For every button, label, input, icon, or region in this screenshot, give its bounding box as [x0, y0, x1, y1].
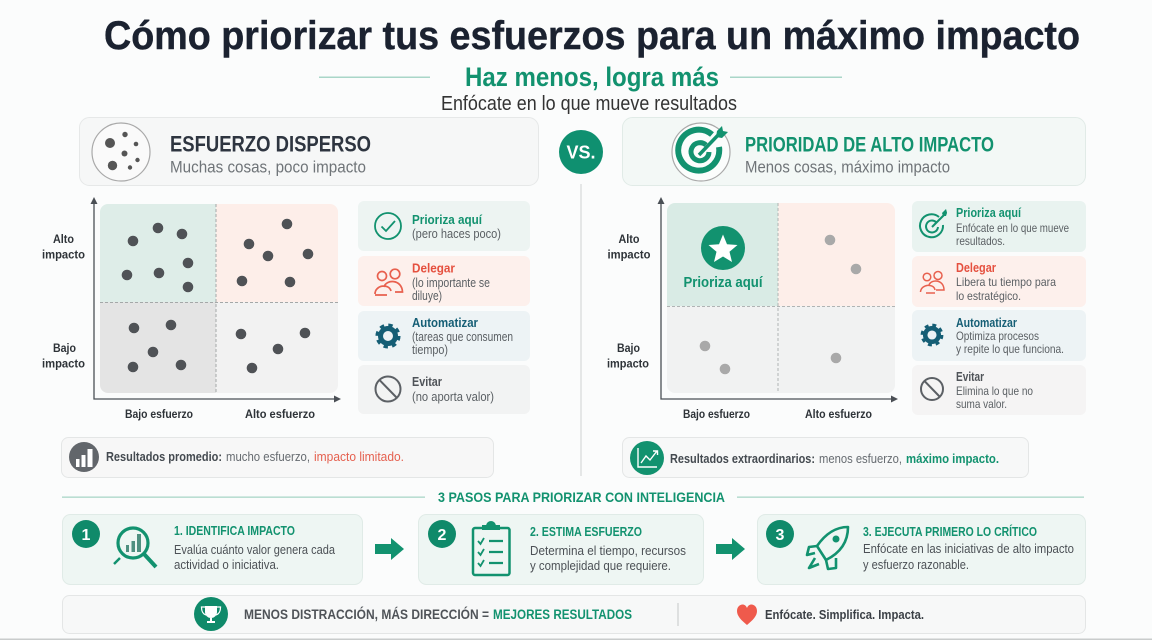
chart: right matrix: Alto esfuerzo [805, 407, 872, 421]
result: extraordinarios: máximo impacto. [906, 451, 999, 466]
bottom banner [62, 596, 1086, 634]
chart: right matrix [607, 197, 898, 421]
step 1: 1. IDENTIFICA IMPACTO [174, 524, 295, 538]
legend item: prioriza: (pero haces poco) [412, 227, 501, 241]
chart: left matrix: Bajo [53, 341, 76, 355]
step 3: y esfuerzo razonable. [863, 558, 969, 572]
vs badge: VS. [566, 142, 596, 162]
legend: right [912, 201, 1086, 415]
result: promedio [62, 438, 494, 478]
step 2 [418, 514, 704, 584]
legend item: delegar: Delegar [956, 261, 996, 275]
chart: right matrix: Bajo [617, 341, 640, 355]
legend item: automatizar [912, 310, 1086, 361]
chart: left matrix: Bajo esfuerzo [125, 407, 193, 421]
icon: growth chart badge [630, 441, 664, 475]
legend item: evitar: Evitar [956, 370, 984, 384]
panel: esfuerzo disperso header [80, 118, 538, 186]
bottom banner: Enfócate. Simplifica. Impacta. [765, 607, 924, 622]
result: extraordinarios [622, 438, 1028, 478]
icon: scattered dots [92, 123, 150, 181]
step 2: y complejidad que requiere. [530, 559, 671, 573]
step 2: Determina el tiempo, recursos [530, 544, 686, 558]
subheading: Menos cosas, máximo impacto [745, 159, 950, 177]
step 3 [758, 514, 1086, 584]
heading: PRIORIDAD DE ALTO IMPACTO [745, 134, 994, 156]
step 3: Enfócate en las iniciativas de alto impacto [863, 542, 1074, 556]
icon: clipboard [473, 522, 510, 575]
legend item: delegar: diluye) [412, 289, 442, 303]
result: promedio: mucho esfuerzo, [226, 449, 310, 464]
arrow 1 [375, 538, 404, 560]
result: promedio: impacto limitado. [314, 449, 404, 464]
legend item: prioriza [358, 201, 530, 251]
legend item: delegar: (lo importante se [412, 276, 490, 290]
legend item: prioriza: Prioriza aquí [956, 206, 1021, 220]
legend item: prioriza: Enfócate en lo que mueve [956, 221, 1069, 235]
label: prioriza aquí: Prioriza aquí [684, 274, 763, 291]
chart: left matrix: impacto [42, 248, 85, 262]
legend item: automatizar [358, 311, 530, 361]
panel: prioridad header [622, 118, 1086, 186]
icon: rocket [807, 527, 848, 569]
chart: right matrix: Bajo esfuerzo [683, 407, 750, 421]
legend item: delegar: Libera tu tiempo para [956, 275, 1056, 289]
step 3: 3. EJECUTA PRIMERO LO CRÍTICO [863, 524, 1037, 539]
legend item: evitar: suma valor. [956, 397, 1007, 411]
title: Cómo priorizar tus esfuerzos para un máximo impacto [104, 14, 1080, 58]
result: promedio: Resultados promedio: [106, 449, 222, 464]
icon: trophy [194, 597, 228, 631]
icon: star badge [701, 226, 745, 270]
legend item: automatizar: y repite lo que funciona. [956, 342, 1064, 356]
step 1: 1 [82, 527, 91, 544]
result: extraordinarios: Resultados extraordinarios: [670, 451, 815, 466]
step 1: Evalúa cuánto valor genera cada [174, 543, 335, 557]
legend item: automatizar: Optimiza procesos [956, 329, 1039, 343]
tagline: Enfócate en lo que mueve resultados [441, 93, 737, 115]
legend item: evitar: (no aporta valor) [412, 390, 494, 404]
vs badge [559, 130, 603, 174]
legend item: prioriza [912, 201, 1086, 252]
chart: left matrix: Alto [53, 232, 74, 246]
chart: left matrix: impacto [42, 356, 85, 370]
heading: ESFUERZO DISPERSO [170, 132, 371, 156]
icon: target [672, 123, 730, 181]
result: extraordinarios: menos esfuerzo, [819, 451, 902, 466]
icon: heart [737, 604, 757, 625]
chart: left matrix [42, 197, 341, 421]
step 1: actividad o iniciativa. [174, 558, 279, 572]
bottom banner: MENOS DISTRACCIÓN, MÁS DIRECCIÓN = [244, 607, 489, 622]
legend item: automatizar: Automatizar [412, 315, 478, 330]
icon: magnifier [114, 528, 156, 567]
legend item: automatizar: tiempo) [412, 343, 448, 357]
legend: left [358, 201, 530, 414]
section heading: 3 pasos: 3 PASOS PARA PRIORIZAR CON INTELIGENCIA [438, 489, 725, 505]
step 1 [62, 514, 362, 584]
bottom banner: MEJORES RESULTADOS [493, 607, 632, 622]
legend item: delegar: lo estratégico. [956, 289, 1021, 303]
legend item: automatizar: Automatizar [956, 316, 1017, 330]
legend item: delegar [358, 256, 530, 306]
subheading: Muchas cosas, poco impacto [170, 159, 366, 177]
arrow 2 [716, 538, 745, 560]
step 2: 2 [438, 527, 447, 544]
legend item: evitar: Evitar [412, 374, 442, 389]
chart: right matrix: Alto [618, 232, 640, 246]
subtitle: Haz menos, logra más [465, 62, 719, 92]
step 3: 3 [776, 527, 785, 544]
legend item: evitar: Elimina lo que no [956, 384, 1033, 398]
legend item: delegar: Delegar [412, 260, 455, 276]
legend item: evitar [358, 365, 530, 414]
chart: right matrix: impacto [608, 248, 650, 262]
legend item: prioriza: resultados. [956, 234, 1005, 248]
legend item: delegar [912, 256, 1086, 307]
legend item: evitar [912, 365, 1086, 415]
legend item: prioriza: Prioriza aquí [412, 212, 482, 227]
icon: bar chart badge [69, 442, 99, 472]
chart: right matrix: impacto [607, 356, 649, 370]
legend item: automatizar: (tareas que consumen [412, 330, 513, 344]
chart: left matrix: Alto esfuerzo [245, 407, 315, 421]
step 2: 2. ESTIMA ESFUERZO [530, 525, 642, 539]
